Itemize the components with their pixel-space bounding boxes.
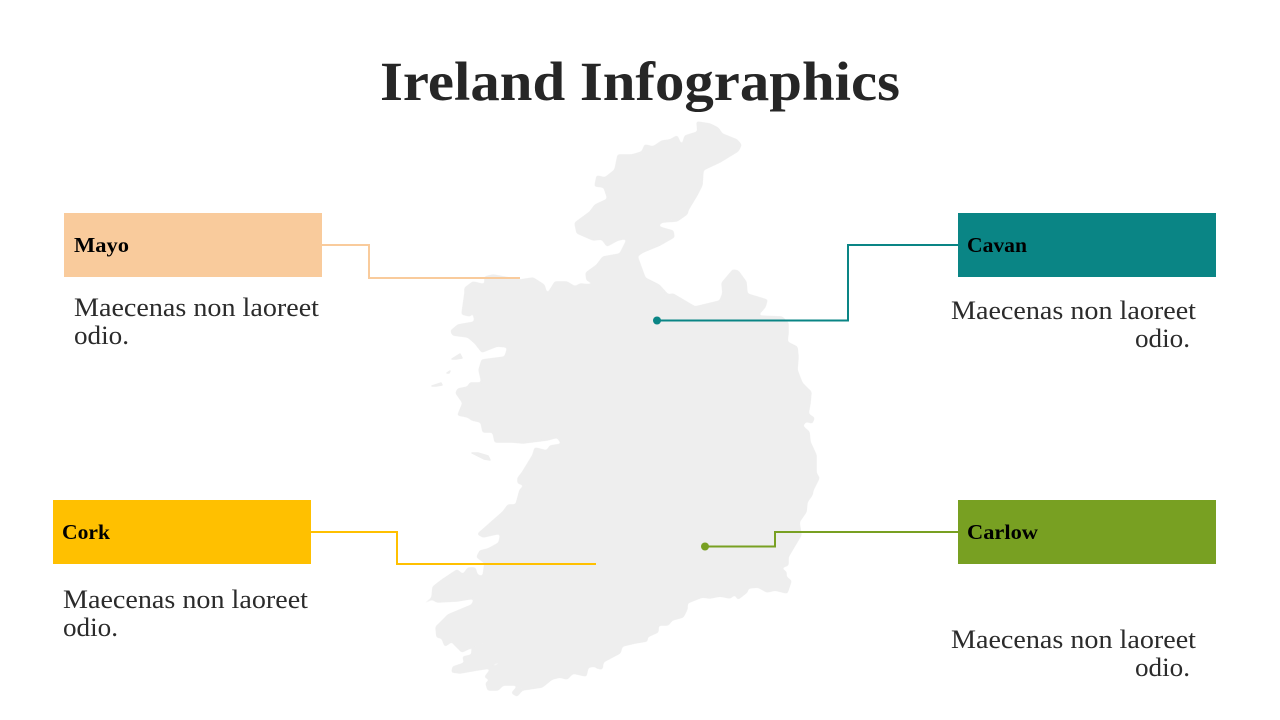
label box: Mayo: Mayo: [74, 233, 129, 257]
text: Carlow description: odio.: [1135, 653, 1190, 682]
label box: Cavan: Cavan: [967, 233, 1027, 257]
text: Mayo description: odio.: [74, 321, 129, 350]
label box: Cavan: [958, 213, 1216, 277]
connector: Carlow: [701, 532, 958, 550]
title: Ireland Infographics: [380, 51, 900, 112]
text: Carlow description: [951, 625, 1197, 682]
connector: Cavan: [653, 245, 958, 324]
text: Cavan description: [951, 296, 1197, 353]
label box: Carlow: [958, 500, 1216, 564]
connector: Cork: [311, 532, 596, 564]
label box: Mayo: [64, 213, 322, 277]
label box: Cork: [53, 500, 311, 564]
text: Cavan description: Maecenas non laoreet: [951, 296, 1197, 325]
connector: Mayo: [322, 245, 520, 278]
map of Ireland: [425, 122, 819, 696]
text: Carlow description: Maecenas non laoreet: [951, 625, 1197, 654]
text: Cavan description: odio.: [1135, 324, 1190, 353]
text: Mayo description: [74, 293, 320, 350]
label box: Carlow: Carlow: [967, 520, 1039, 544]
text: Cork description: odio.: [63, 613, 118, 642]
text: Cork description: Maecenas non laoreet: [63, 585, 309, 614]
text: Mayo description: Maecenas non laoreet: [74, 293, 320, 322]
text: Cork description: [63, 585, 309, 642]
label box: Cork: Cork: [62, 520, 110, 544]
